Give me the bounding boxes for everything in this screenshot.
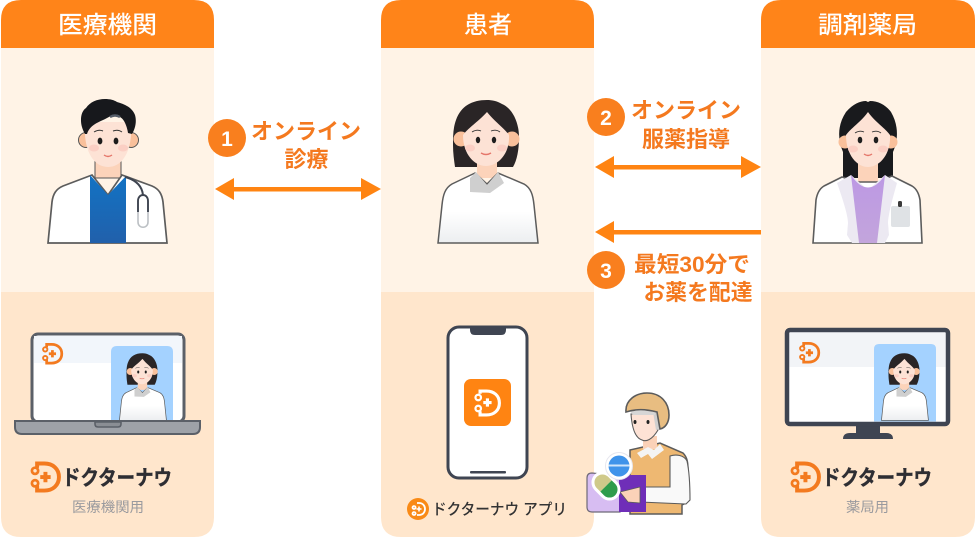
panel header: pharmacy: 調剤薬局 xyxy=(818,12,917,39)
panel header: patient: 患者 xyxy=(464,12,512,39)
step 2: online medication guidance: オンライン xyxy=(631,98,741,123)
icon: monitor xyxy=(787,330,948,439)
step 1: online consultation xyxy=(208,119,361,172)
logo: doctor now app xyxy=(407,498,567,520)
panel: pharmacy xyxy=(761,0,975,537)
step 1: online consultation: 診療 xyxy=(284,147,328,172)
logo: doctor now: ドクターナウ xyxy=(822,467,932,490)
step 3: delivery within 30 minutes: 3 xyxy=(600,260,612,283)
step 2: online medication guidance xyxy=(587,98,741,152)
step 1: online consultation: オンライン xyxy=(251,119,361,144)
panel header: pharmacy xyxy=(761,0,975,48)
logo: doctor now xyxy=(792,464,932,491)
step 2: online medication guidance: 服薬指導 xyxy=(642,127,730,152)
label: for medical institutions: 医療機関用 xyxy=(72,499,144,515)
icon: pharmacist xyxy=(813,101,922,243)
panel: patient xyxy=(381,0,594,537)
step 1: online consultation: 1 xyxy=(221,128,233,151)
panel header: medical institution: 医療機関 xyxy=(58,12,157,39)
icon: smartphone xyxy=(448,327,527,478)
label: for pharmacies: 薬局用 xyxy=(846,499,889,515)
step 3: delivery within 30 minutes: お薬を配達 xyxy=(644,280,752,305)
arrow: pharmacy to patient delivery xyxy=(595,221,761,243)
logo: doctor now xyxy=(32,464,172,491)
logo: doctor now app: ドクターナウ アプリ xyxy=(432,500,567,518)
logo: doctor now: ドクターナウ xyxy=(62,467,172,490)
icon: doctor xyxy=(48,99,167,243)
icon: laptop xyxy=(15,334,200,434)
arrow: patient to pharmacy xyxy=(595,156,761,178)
icon: patient xyxy=(438,100,538,243)
panel: medical institution xyxy=(1,0,214,537)
panel header: medical institution xyxy=(1,0,214,48)
arrow: doctor to patient xyxy=(215,178,381,200)
icon: delivery person xyxy=(587,393,690,514)
step 3: delivery within 30 minutes xyxy=(587,251,752,305)
step 3: delivery within 30 minutes: 最短30分で xyxy=(634,252,750,277)
panel header: patient xyxy=(381,0,594,48)
step 2: online medication guidance: 2 xyxy=(600,107,612,130)
